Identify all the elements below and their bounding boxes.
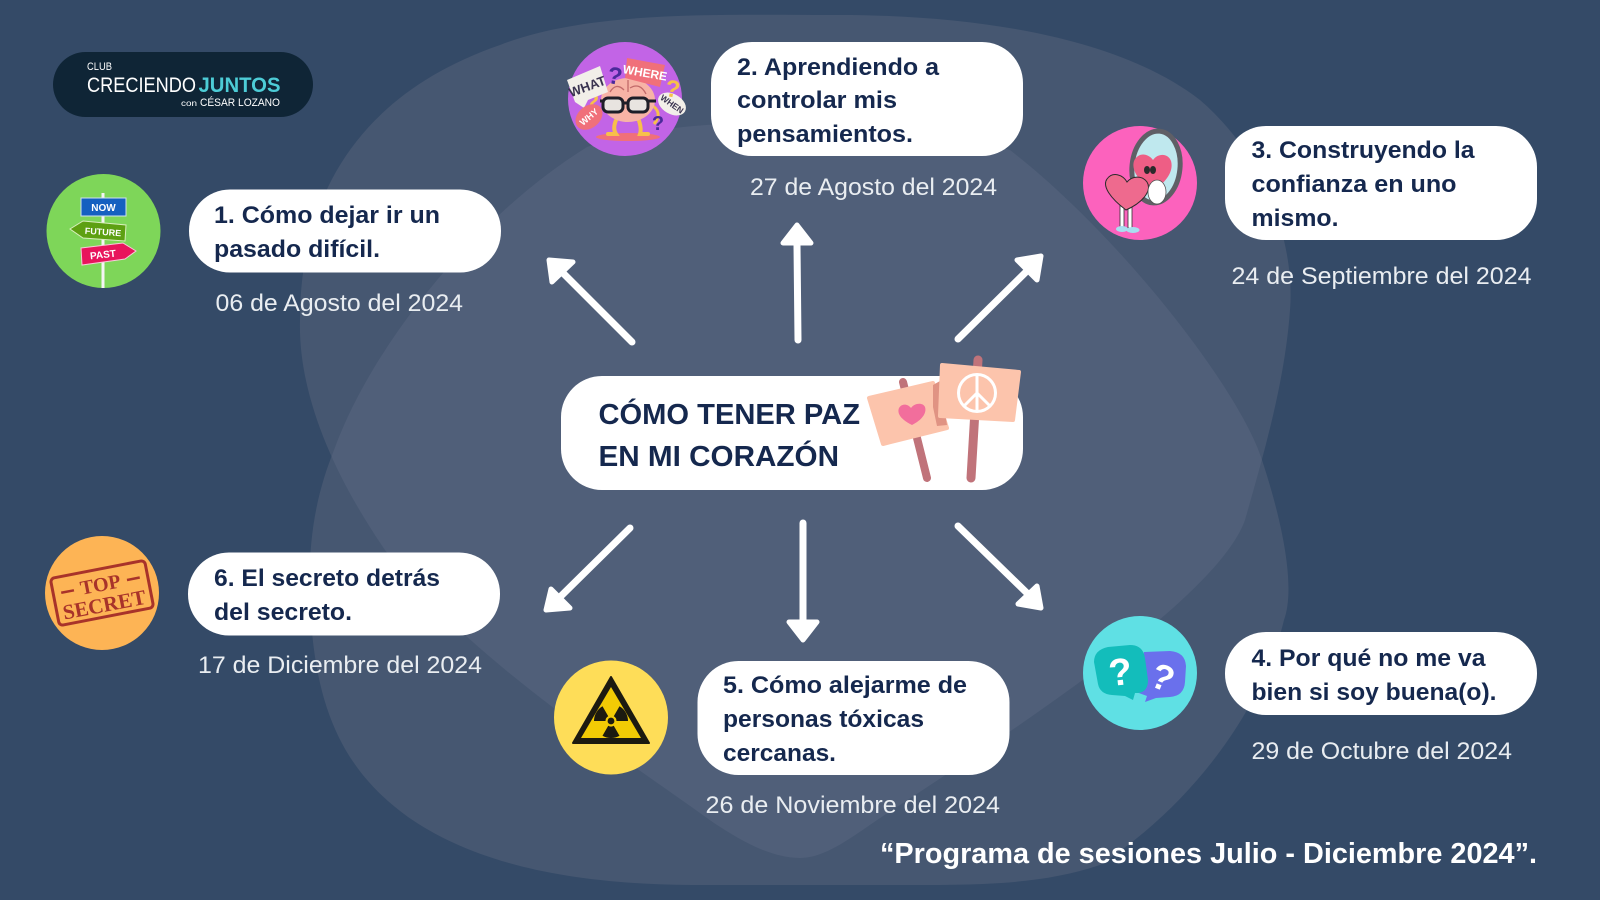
icon: thinking brain: WHEN xyxy=(658,92,686,116)
date: 27 de Agosto del 2024 xyxy=(750,174,997,201)
arrow: to session 3 xyxy=(958,256,1041,339)
icon: road signs xyxy=(46,174,160,288)
topic text: 5. Cómo alejarme de xyxy=(723,672,967,699)
icon: thinking brain: ? xyxy=(605,62,624,91)
topic pill xyxy=(1225,126,1537,240)
arrow: to session 6 xyxy=(546,528,630,610)
date: 26 de Noviembre del 2024 xyxy=(706,792,1000,819)
icon: heart and mirror xyxy=(1083,126,1197,240)
topic text xyxy=(1252,645,1496,706)
topic pill xyxy=(711,42,1023,156)
topic text: 6. El secreto detrás xyxy=(214,565,440,592)
icon: thinking brain: WHAT xyxy=(567,73,608,100)
icon: question speech bubbles: ? xyxy=(1107,651,1134,695)
panel: session 2 xyxy=(567,42,1023,201)
icon: thinking brain: WHY xyxy=(578,106,600,128)
arrow: to session 4 xyxy=(958,526,1041,608)
topic text: 4. Por qué no me va xyxy=(1252,645,1486,672)
icon: peace and heart signs xyxy=(869,360,1019,478)
topic text: 3. Construyendo la xyxy=(1252,137,1475,164)
topic text: del secreto. xyxy=(214,599,352,626)
topic text xyxy=(1252,137,1475,232)
icon: road signs: PAST xyxy=(90,249,117,262)
logo: Club Creciendo Juntos: CÉSAR LOZANO xyxy=(200,96,280,109)
icon: road signs: NOW xyxy=(91,203,116,214)
icon: thinking brain: ? xyxy=(585,89,599,116)
central title: CÓMO TENER PAZ xyxy=(598,397,860,431)
topic text: confianza en uno xyxy=(1252,171,1456,198)
icon: radiation warning xyxy=(554,660,668,774)
panel: central theme xyxy=(561,360,1023,490)
icon: top secret stamp: SECRET xyxy=(61,585,148,625)
central title: EN MI CORAZÓN xyxy=(598,439,839,473)
topic text xyxy=(723,672,967,767)
logo: Club Creciendo Juntos: con xyxy=(181,99,197,108)
panel: session 6 xyxy=(45,536,500,679)
date: 17 de Diciembre del 2024 xyxy=(198,652,482,679)
date: 06 de Agosto del 2024 xyxy=(216,290,463,317)
logo: Club Creciendo Juntos xyxy=(53,52,313,117)
topic text xyxy=(214,202,440,263)
topic text: bien si soy buena(o). xyxy=(1252,679,1496,706)
icon: thinking brain: WHERE xyxy=(622,62,668,84)
topic pill xyxy=(698,661,1010,775)
icon: top secret stamp: TOP xyxy=(78,570,123,600)
topic text: mismo. xyxy=(1252,205,1338,232)
icon: top secret stamp xyxy=(45,536,159,650)
footer: programme title: “Programa de sesiones Julio - Diciembre 2024”. xyxy=(880,838,1537,870)
central title xyxy=(598,397,860,473)
topic text: 1. Cómo dejar ir un xyxy=(214,202,440,229)
icon: thinking brain xyxy=(567,42,690,156)
panel: session 5 xyxy=(554,660,1010,819)
topic text: controlar mis xyxy=(737,87,897,114)
logo: Club Creciendo Juntos: CRECIENDO xyxy=(87,74,196,97)
topic pill xyxy=(188,552,500,636)
arrow: to session 5 xyxy=(789,523,817,640)
date: 29 de Octubre del 2024 xyxy=(1252,738,1512,765)
panel: session 3 xyxy=(1083,126,1537,290)
topic pill xyxy=(1225,632,1537,715)
icon: road signs: FUTURE xyxy=(84,226,122,238)
date: 24 de Septiembre del 2024 xyxy=(1232,263,1532,290)
topic text: pasado difícil. xyxy=(214,236,380,263)
topic text: personas tóxicas xyxy=(723,706,924,733)
icon: thinking brain: ? xyxy=(663,75,682,104)
central pill xyxy=(561,376,1023,490)
icon: question speech bubbles: ? xyxy=(1145,654,1181,701)
topic text: 2. Aprendiendo a xyxy=(737,54,940,81)
icon: thinking brain: ? xyxy=(652,113,664,135)
topic text xyxy=(737,54,940,148)
topic text xyxy=(214,565,440,626)
topic text: cercanas. xyxy=(723,740,836,767)
panel: session 1 xyxy=(46,174,501,317)
topic pill xyxy=(189,190,501,272)
icon: question speech bubbles xyxy=(1083,616,1197,730)
arrow: to session 1 xyxy=(549,260,632,342)
logo: Club Creciendo Juntos: JUNTOS xyxy=(198,74,280,97)
arrow: to session 2 xyxy=(783,225,811,340)
topic text: pensamientos. xyxy=(737,121,913,148)
logo: Club Creciendo Juntos: CLUB xyxy=(87,61,112,73)
panel: session 4 xyxy=(1083,616,1537,765)
